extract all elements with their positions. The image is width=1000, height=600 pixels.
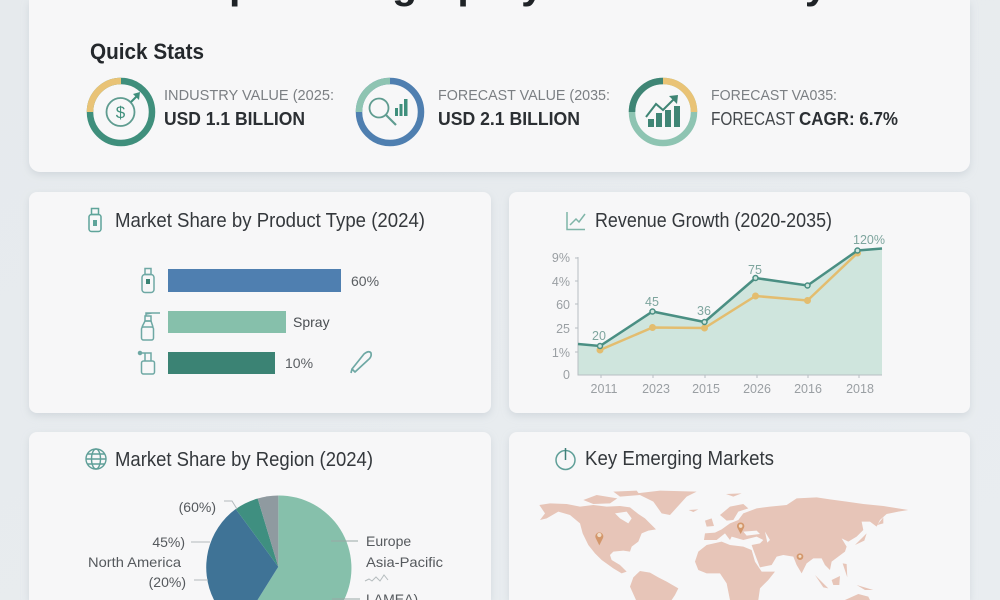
data labels: 120% bbox=[853, 233, 885, 247]
icon: dollar ring: $ bbox=[116, 103, 126, 122]
axis labels: 2018 bbox=[846, 382, 874, 396]
icon: bottle bbox=[142, 268, 154, 292]
bar chart: 60% bbox=[351, 273, 379, 289]
pie labels bbox=[88, 499, 443, 600]
pie labels: (20%) bbox=[149, 574, 186, 590]
axis labels: 25 bbox=[556, 322, 570, 336]
axis labels: 2015 bbox=[692, 382, 720, 396]
stat: forecast cagr bbox=[632, 81, 898, 143]
pie labels: North America bbox=[88, 554, 181, 570]
stat: forecast cagr: CAGR: 6.7% bbox=[799, 109, 898, 129]
data labels bbox=[592, 233, 885, 343]
icon: pump bottle bbox=[138, 352, 154, 374]
label: INDUSTRY VALUE (2025: bbox=[164, 87, 334, 104]
axis labels bbox=[552, 251, 874, 396]
icon: spray bottle bbox=[142, 313, 160, 340]
axis labels: 9% bbox=[552, 251, 570, 265]
pie chart bbox=[191, 495, 388, 600]
bar chart: Spray bbox=[293, 314, 330, 330]
icon: globe bbox=[86, 449, 106, 469]
pie labels: (60%) bbox=[179, 499, 216, 515]
icon: compass bbox=[556, 448, 575, 470]
panel: market share by region bbox=[29, 432, 491, 600]
axis labels: 1% bbox=[552, 346, 570, 360]
value: USD 1.1 BILLION bbox=[164, 109, 305, 129]
axis labels: 2011 bbox=[591, 382, 617, 396]
axis labels: 2016 bbox=[794, 382, 822, 396]
heading: Market Share by Region (2024) bbox=[115, 449, 373, 471]
heading: Key Emerging Markets bbox=[585, 448, 774, 470]
stat: industry value bbox=[90, 81, 334, 143]
heading: quick stats: Quick Stats bbox=[90, 39, 204, 64]
icon: dropper bbox=[351, 352, 371, 373]
axis labels: 0 bbox=[563, 368, 570, 382]
panel: revenue growth bbox=[509, 192, 970, 413]
series: forecast line bbox=[596, 250, 861, 354]
bar chart bbox=[168, 269, 379, 374]
panel: quick stats bbox=[29, 0, 970, 172]
data labels: 45 bbox=[645, 295, 659, 309]
heading: Revenue Growth (2020-2035) bbox=[595, 210, 832, 232]
axis labels: 2023 bbox=[642, 382, 670, 396]
data labels: 36 bbox=[697, 304, 711, 318]
label: FORECAST VA035: bbox=[711, 87, 837, 104]
data labels: 75 bbox=[748, 263, 762, 277]
pie labels: 45%) bbox=[152, 534, 185, 550]
heading: Market Share by Product Type (2024) bbox=[115, 210, 425, 232]
icon: magnifier ring bbox=[359, 81, 421, 143]
label: FORECAST VALUE (2035: bbox=[438, 87, 610, 104]
icon: growth ring bbox=[632, 81, 694, 143]
series: revenue line bbox=[578, 248, 882, 348]
stat: forecast value bbox=[359, 81, 610, 143]
world map bbox=[539, 491, 908, 600]
value: USD 2.1 BILLION bbox=[438, 109, 580, 129]
line chart bbox=[552, 233, 885, 396]
axis labels: 4% bbox=[552, 275, 570, 289]
pin: india bbox=[797, 553, 803, 560]
axis labels: 60 bbox=[556, 298, 570, 312]
pin: north america bbox=[595, 532, 603, 545]
pin: europe bbox=[737, 522, 744, 534]
bar chart: 10% bbox=[285, 355, 313, 371]
pie labels: Asia-Pacific bbox=[366, 554, 443, 570]
value: FORECAST bbox=[711, 109, 795, 129]
icon: line chart heading bbox=[567, 212, 585, 230]
icon: bottle heading bbox=[89, 208, 101, 232]
panel: market share by product type bbox=[29, 192, 491, 413]
pie labels: Europe bbox=[366, 533, 411, 549]
icon: dollar ring bbox=[90, 81, 152, 143]
axis labels: 2026 bbox=[743, 382, 771, 396]
panel: key emerging markets bbox=[509, 432, 970, 600]
data labels: 20 bbox=[592, 329, 606, 343]
